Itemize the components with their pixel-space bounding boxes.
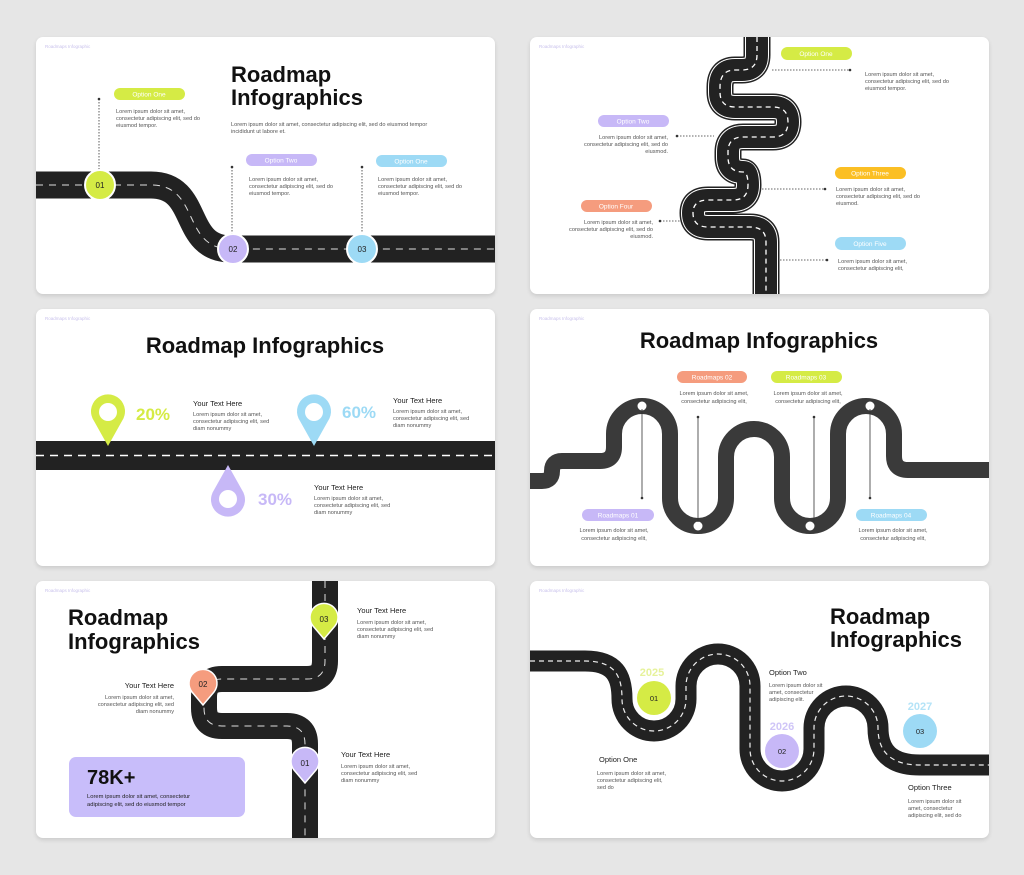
roadmaps 03: consectetur adipiscing elit, (775, 399, 841, 405)
option two label: Lorem ipsum dolor sit amet, (249, 177, 318, 183)
stat box 78K+ (69, 757, 245, 817)
option three text: amet, consectetur (908, 806, 953, 812)
option one label: Option One (132, 92, 166, 98)
option five: Option Five (853, 241, 887, 248)
text block 03 (357, 606, 433, 640)
option one text: sed do (597, 785, 614, 791)
option three: Lorem ipsum dolor sit amet, (836, 187, 905, 193)
intro text: incididunt ut labore et. (231, 129, 286, 135)
text block 01: Your Text Here (341, 750, 390, 759)
marker 03: 03 (358, 245, 367, 254)
text block 3: Your Text Here (314, 483, 363, 492)
milestone 01 2025: 2025 (640, 667, 664, 679)
roadmaps 02 (677, 371, 749, 405)
milestone 03 2027 (903, 701, 937, 748)
option two text: Lorem ipsum dolor sit (769, 683, 822, 689)
roadmaps 01: consectetur adipiscing elit, (581, 536, 647, 542)
text block 3: consectetur adipiscing elit, sed (314, 503, 390, 509)
text block 03: diam nonummy (357, 634, 395, 640)
pin lime 20% (91, 394, 170, 446)
pin blue 60% (297, 394, 376, 446)
text block 1: Lorem ipsum dolor sit amet, (193, 412, 262, 418)
text block 2: consectetur adipiscing elit, sed (393, 416, 469, 422)
milestone 02 2026: 2026 (770, 721, 794, 733)
road (693, 37, 788, 294)
text block 1: Your Text Here (193, 399, 242, 408)
option two: eiusmod. (645, 149, 668, 155)
pin 03 (310, 603, 338, 639)
pin lavender 30% (211, 465, 292, 517)
text block 01: Lorem ipsum dolor sit amet, (341, 764, 410, 770)
option two text: amet, consectetur (769, 690, 814, 696)
option two label: consectetur adipiscing elit, sed do (249, 184, 333, 190)
panel: card 5 vertical road with stat box: Roadmaps Infographic (45, 588, 91, 593)
road (36, 185, 495, 249)
roadmaps 03: Roadmaps 03 (786, 374, 827, 382)
panel: card 1 roadmap three steps: Roadmaps Infographic (45, 44, 91, 49)
option one: consectetur adipiscing elit, sed do (865, 79, 949, 85)
pin 03: 03 (320, 615, 329, 624)
dotted connectors (99, 99, 362, 234)
text block 2: diam nonummy (393, 423, 431, 429)
pin 01 (291, 747, 319, 783)
text block 3: Lorem ipsum dolor sit amet, (314, 496, 383, 502)
text block 03: Your Text Here (357, 606, 406, 615)
panel: card 6 timeline road 2025-2027 (530, 581, 989, 838)
roadmaps 04: Lorem ipsum dolor sit amet, (858, 528, 928, 534)
pin 01: 01 (301, 759, 310, 768)
option two: Option Two (617, 118, 650, 126)
roadmaps 04 (856, 509, 928, 542)
option one text: Option One (599, 755, 637, 764)
text block 03: consectetur adipiscing elit, sed (357, 627, 433, 633)
pin 02: 02 (199, 680, 208, 689)
panel: card 6 timeline road 2025-2027: Roadmaps Infographic (539, 588, 585, 593)
title: Roadmap (68, 605, 168, 630)
option two text: adipiscing elit. (769, 697, 805, 703)
panel: card 5 vertical road with stat box (36, 581, 495, 838)
text block 3 (314, 483, 390, 516)
option one (blue) label: eiusmod tempor. (378, 191, 420, 197)
road (36, 441, 495, 470)
text block 01 (341, 750, 417, 784)
option three (835, 167, 920, 207)
marker 01: 01 (96, 181, 105, 190)
text block 03: Lorem ipsum dolor sit amet, (357, 620, 426, 626)
pin blue 60%: 60% (342, 403, 376, 422)
option one text: Lorem ipsum dolor sit amet, (597, 771, 666, 777)
title: Infographics (231, 85, 363, 110)
text block 2 (393, 396, 469, 429)
milestone 03 2027: 2027 (908, 701, 932, 713)
stat box 78K+: Lorem ipsum dolor sit amet, consectetur (87, 794, 190, 800)
text block 1: diam nonummy (193, 426, 231, 432)
text block 2: Lorem ipsum dolor sit amet, (393, 409, 462, 415)
stat box 78K+: 78K+ (87, 767, 135, 789)
text block 02 (98, 681, 174, 715)
option two text: Option Two (769, 668, 807, 677)
text block 02: Lorem ipsum dolor sit amet, (105, 695, 174, 701)
option two: consectetur adipiscing elit, sed do (584, 142, 668, 148)
option one: Option One (799, 51, 833, 58)
option four (569, 200, 653, 240)
option one (blue) label: Option One (394, 158, 428, 166)
option three: Option Three (851, 170, 889, 178)
roadmaps 01: Roadmaps 01 (598, 512, 639, 520)
option two text (769, 668, 823, 703)
option two: Lorem ipsum dolor sit amet, (599, 135, 668, 141)
option five: consectetur adipiscing elit, (838, 266, 904, 272)
panel: card 3 straight road with pins: Roadmaps Infographic (45, 316, 91, 321)
text block 1 (193, 399, 269, 432)
option one (781, 47, 949, 92)
title: Roadmap Infographics (640, 328, 878, 353)
option three text (908, 783, 962, 819)
milestone 02 2026: 02 (778, 747, 786, 756)
option one label: consectetur adipiscing elit, sed do (116, 116, 200, 122)
option two (584, 115, 669, 155)
option one: Lorem ipsum dolor sit amet, (865, 72, 934, 78)
road (530, 654, 989, 781)
option three: consectetur adipiscing elit, sed do (836, 194, 920, 200)
panel: card 3 straight road with pins (36, 309, 495, 566)
title: Roadmap Infographics (146, 333, 384, 358)
marker 01 (85, 170, 115, 200)
milestone 03 2027: 03 (916, 727, 924, 736)
option two label: Option Two (265, 158, 298, 164)
roadmaps 03 (771, 371, 843, 405)
text block 02: Your Text Here (125, 681, 174, 690)
text block 01: consectetur adipiscing elit, sed (341, 771, 417, 777)
roadmaps 01 (579, 509, 654, 542)
option three text: Lorem ipsum dolor sit (908, 799, 961, 805)
connector lines (642, 409, 870, 522)
milestone 02 2026 (765, 721, 799, 768)
option one (blue) label (376, 155, 462, 197)
pin 02 (189, 669, 217, 705)
roadmaps 04: consectetur adipiscing elit, (860, 536, 926, 542)
panel: card 2 serpentine road five options (530, 37, 989, 294)
milestone 01 2025: 01 (650, 694, 658, 703)
option five: Lorem ipsum dolor sit amet, (838, 259, 907, 265)
roadmaps 02: consectetur adipiscing elit, (681, 399, 747, 405)
option four: Lorem ipsum dolor sit amet, (584, 220, 653, 226)
text block 02: diam nonummy (136, 709, 174, 715)
milestone 01 2025 (637, 667, 671, 715)
text block 02: consectetur adipiscing elit, sed (98, 702, 174, 708)
roadmaps 04: Roadmaps 04 (871, 512, 912, 520)
panel: card 1 roadmap three steps (36, 37, 495, 294)
title: Infographics (830, 627, 962, 652)
text block 01: diam nonummy (341, 778, 379, 784)
panel: card 4 wavy road four roadmaps: Roadmaps Infographic (539, 316, 585, 321)
option one label (114, 88, 200, 129)
roadmaps 03: Lorem ipsum dolor sit amet, (773, 391, 843, 397)
pin lavender 30%: 30% (258, 490, 292, 509)
option three: eiusmod. (836, 201, 859, 207)
option five (835, 237, 907, 272)
option one text (597, 755, 666, 791)
panel: card 2 serpentine road five options: Roadmaps Infographic (539, 44, 585, 49)
option one label: eiusmod tempor. (116, 123, 158, 129)
option two label: eiusmod tempor. (249, 191, 291, 197)
dotted connectors (660, 70, 850, 260)
pin lime 20%: 20% (136, 405, 170, 424)
option one (blue) label: Lorem ipsum dolor sit amet, (378, 177, 447, 183)
marker 02 (218, 234, 248, 264)
title: Infographics (68, 629, 200, 654)
title: Roadmap (231, 62, 331, 87)
panel: card 4 wavy road four roadmaps (530, 309, 989, 566)
road (204, 581, 325, 838)
road (530, 402, 989, 530)
roadmaps 01: Lorem ipsum dolor sit amet, (579, 528, 649, 534)
option one (blue) label: consectetur adipiscing elit, sed do (378, 184, 462, 190)
title: Roadmap (830, 604, 930, 629)
option four: eiusmod. (630, 234, 653, 240)
stat box 78K+: adipiscing elit, sed do eiusmod tempor (87, 802, 186, 808)
option four: Option Four (599, 204, 634, 210)
option one label: Lorem ipsum dolor sit amet, (116, 109, 185, 115)
text block 3: diam nonummy (314, 510, 352, 516)
marker 03 (347, 234, 377, 264)
text block 1: consectetur adipiscing elit, sed (193, 419, 269, 425)
text block 2: Your Text Here (393, 396, 442, 405)
roadmaps 02: Roadmaps 02 (692, 374, 733, 382)
option four: consectetur adipiscing elit, sed do (569, 227, 653, 233)
roadmaps 02: Lorem ipsum dolor sit amet, (679, 391, 749, 397)
option two label (246, 154, 333, 197)
option three text: adipiscing elit, sed do (908, 813, 962, 819)
option three text: Option Three (908, 783, 952, 792)
option one: eiusmod tempor. (865, 86, 907, 92)
option one text: consectetur adipiscing elit, (597, 778, 663, 784)
marker 02: 02 (229, 245, 238, 254)
intro text: Lorem ipsum dolor sit amet, consectetur adipiscing elit, sed do eiusmod tempor (231, 122, 427, 128)
